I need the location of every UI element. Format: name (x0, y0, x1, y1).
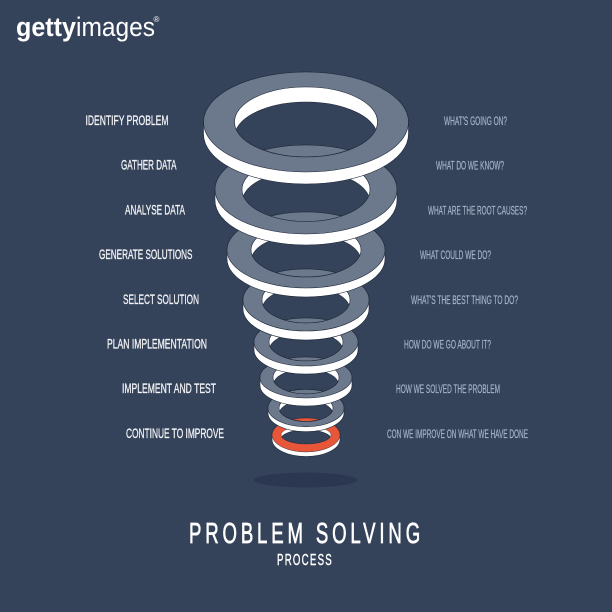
logo: gettyimages: ® (154, 15, 160, 24)
left step labels: PLAN IMPLEMENTATION (107, 336, 207, 352)
ground shadow (254, 472, 358, 488)
title: PROBLEM SOLVING (189, 518, 424, 550)
left step labels: IDENTIFY PROBLEM (86, 112, 168, 128)
ring 7: implement and test (268, 389, 344, 432)
left step labels: GATHER DATA (121, 156, 177, 172)
left step labels: IMPLEMENT AND TEST (122, 380, 216, 396)
right question labels: WHAT ARE THE ROOT CAUSES? (428, 206, 527, 218)
logo: gettyimages: getty (16, 12, 76, 42)
subtitle: PROCESS (277, 552, 333, 569)
left step labels: SELECT SOLUTION (123, 291, 199, 307)
funnel of stacked rings (204, 72, 408, 456)
right question labels: WHAT'S THE BEST THING TO DO? (411, 295, 518, 307)
right question labels (387, 116, 528, 441)
right question labels: HOW WE SOLVED THE PROBLEM (396, 384, 500, 396)
left step labels (86, 112, 224, 441)
ring 1: identify problem (204, 72, 408, 184)
ring 8: continue to improve (orange) (272, 418, 340, 456)
logo: gettyimages (16, 12, 160, 42)
right question labels: HOW DO WE GO ABOUT IT? (404, 340, 491, 352)
ring 6: plan implementation (260, 357, 352, 406)
left step labels: ANALYSE DATA (125, 202, 185, 218)
right question labels: WHAT'S GOING ON? (444, 116, 507, 128)
left step labels: GENERATE SOLUTIONS (99, 246, 192, 262)
ring 4: generate solutions (243, 269, 369, 340)
right question labels: WHAT DO WE KNOW? (436, 160, 504, 172)
ring 3: analyse data (227, 212, 385, 297)
ring 5: select solution (254, 318, 358, 374)
logo: gettyimages: images (76, 12, 155, 42)
right question labels: WHAT COULD WE DO? (420, 250, 491, 262)
left step labels: CONTINUE TO IMPROVE (126, 425, 224, 441)
ring 2: gather data (215, 145, 397, 245)
